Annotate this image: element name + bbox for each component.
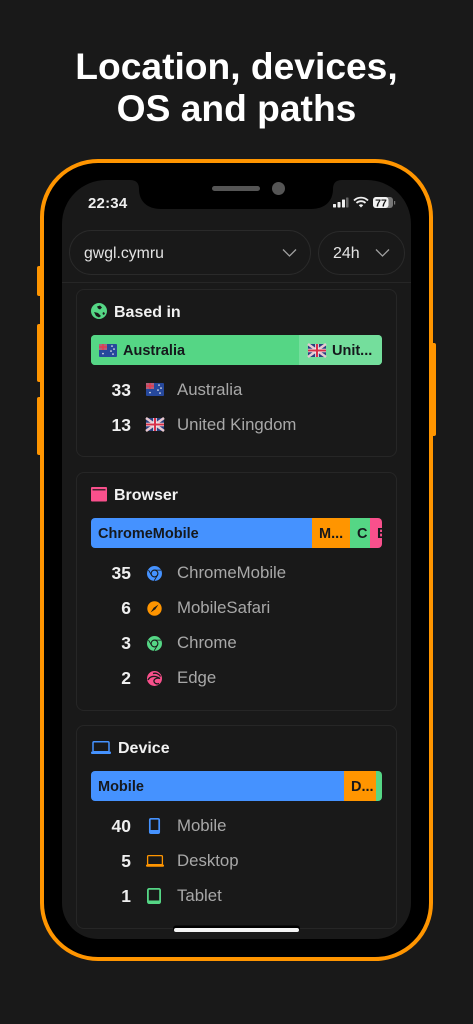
status icons: 77 <box>375 198 387 210</box>
row: chromemobile: 35 <box>112 563 131 583</box>
row: uk: 13 <box>112 415 131 435</box>
bar: based in: Australia <box>123 343 185 359</box>
camera <box>272 182 285 195</box>
bar: device: D... <box>351 779 374 795</box>
label: australia: Australia <box>177 380 242 399</box>
panel: browser <box>76 472 397 711</box>
flag: australia <box>146 383 164 396</box>
bar: browser: M... <box>319 526 343 542</box>
icon: browser window <box>91 487 107 502</box>
status icons <box>333 196 396 210</box>
row: mobilesafari: 6 <box>121 598 131 618</box>
bar: device: Mobile <box>98 779 144 795</box>
divider <box>62 282 411 283</box>
icon: edge <box>147 671 162 686</box>
side buttons <box>37 266 41 296</box>
phone frame <box>40 159 433 961</box>
heading: based in: Based in <box>114 304 181 321</box>
bar: browser <box>91 518 382 548</box>
flag: uk <box>145 417 165 432</box>
chevron <box>282 249 296 257</box>
icon: laptop <box>91 741 111 754</box>
label: tablet: Tablet <box>177 886 222 905</box>
notch <box>132 180 340 209</box>
label: mobile: Mobile <box>177 816 226 835</box>
range label: 24h <box>333 245 360 262</box>
bar: browser: C <box>357 526 367 542</box>
title: OS and paths <box>117 86 356 128</box>
icon: tablet <box>147 888 161 904</box>
row: mobile: 40 <box>112 816 131 836</box>
row: edge: 2 <box>121 668 131 688</box>
speaker <box>212 186 260 191</box>
icon: desktop <box>146 855 164 867</box>
heading: browser: Browser <box>114 487 178 504</box>
icon: chrome blue <box>147 566 162 581</box>
row: tablet: 1 <box>121 886 131 906</box>
bar: browser: ChromeMobile <box>98 526 199 542</box>
icon: mobile <box>148 818 160 834</box>
heading: device: Device <box>118 740 170 757</box>
status time: 22:34 <box>88 195 127 212</box>
panel: based in <box>76 289 397 457</box>
title: Location, devices, <box>75 45 398 87</box>
panel: device <box>76 725 397 929</box>
row: australia: 33 <box>112 380 131 400</box>
range dropdown <box>318 231 405 275</box>
title <box>75 45 398 128</box>
icon: chrome green <box>147 636 162 651</box>
site name: gwgl.cymru <box>84 245 164 262</box>
icon: safari <box>147 601 162 616</box>
label: uk: United Kingdom <box>177 415 296 434</box>
label: mobilesafari: MobileSafari <box>177 598 270 617</box>
home indicator <box>174 928 299 932</box>
label: chromemobile: ChromeMobile <box>177 563 286 582</box>
label: edge: Edge <box>177 668 216 687</box>
phone screen <box>62 180 411 939</box>
row: desktop: 5 <box>121 851 131 871</box>
bar: device <box>91 771 382 801</box>
icon: globe <box>91 303 107 319</box>
bar: based in: Unit... <box>332 343 372 359</box>
label: desktop: Desktop <box>177 851 239 870</box>
label: chrome: Chrome <box>177 633 237 652</box>
chevron <box>376 249 390 257</box>
row: chrome: 3 <box>121 633 131 653</box>
site dropdown <box>69 230 311 275</box>
bar: based in <box>91 335 382 365</box>
